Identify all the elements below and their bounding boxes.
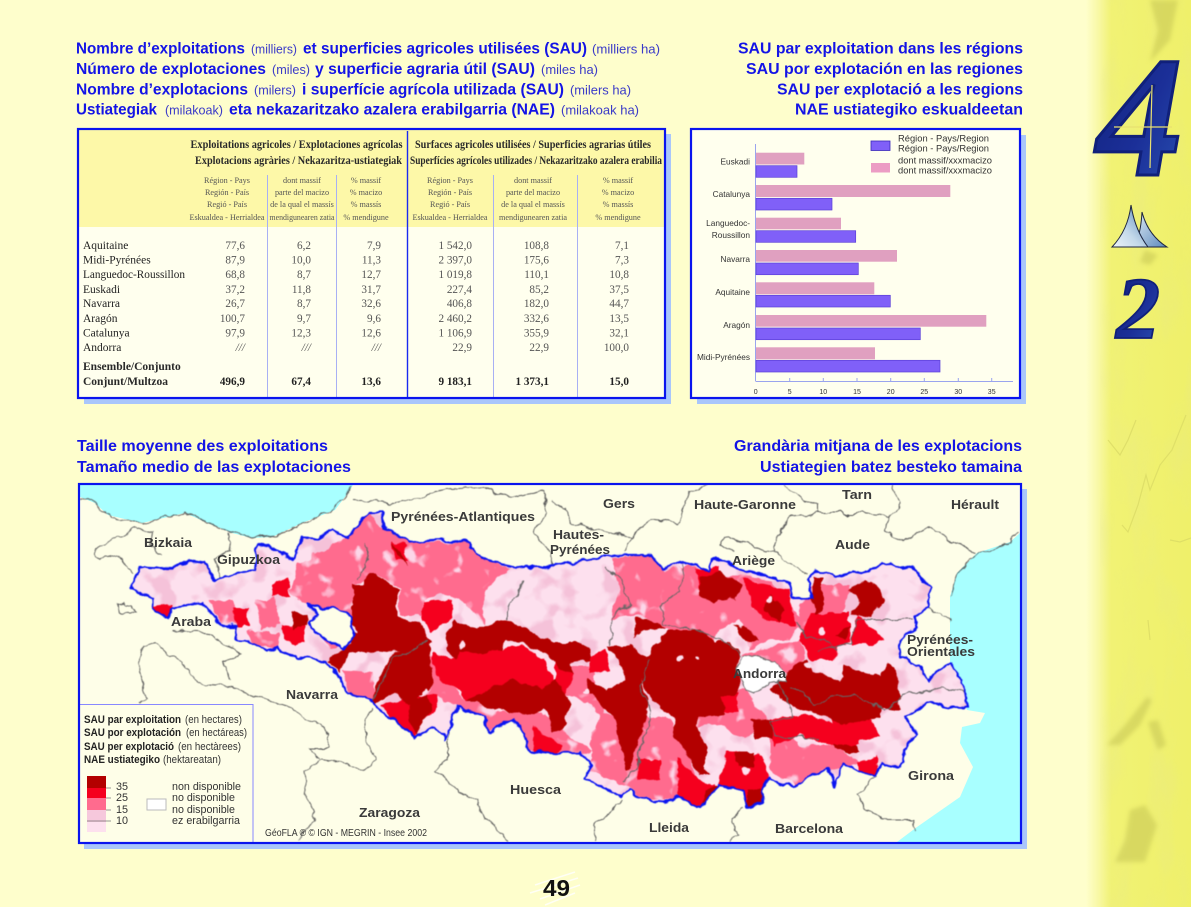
table values: 15,0 [609, 376, 629, 388]
map: sea areas [80, 485, 1020, 842]
chart axis values: 0 [754, 389, 758, 396]
map: place labels: Lleida [649, 821, 690, 835]
map: place labels: Hautes- [553, 528, 604, 542]
table values: 67,4 [291, 376, 311, 388]
page number: 49 [543, 875, 570, 901]
legend colour scale: 15 [116, 804, 128, 816]
table column headings: parte del macizo [506, 188, 560, 197]
table values: /// [301, 342, 312, 354]
legend title: (hektareatan) [163, 754, 221, 766]
table region names [83, 240, 185, 388]
legend title: (en hectares) [185, 714, 242, 726]
map: place labels: Araba [171, 615, 212, 629]
table values: 7,1 [615, 240, 629, 252]
heading: average holding size: Taille moyenne des exploitations [77, 438, 328, 455]
map: outer administrative borders [80, 485, 1020, 842]
table values: 87,9 [225, 254, 245, 266]
legend not available swatch: no disponible [172, 792, 235, 804]
heading: exploitations and SAU: (milers) [254, 82, 296, 98]
table values: 32,6 [361, 298, 381, 310]
chart category labels: Euskadi [720, 156, 750, 166]
map: place labels: Hérault [951, 498, 1000, 512]
map: region borders inside massif [357, 542, 967, 780]
heading: SAU per holding by region: NAE ustiategiko eskualdeetan [795, 102, 1023, 118]
chart legend: dont massif/xxxmacizo [898, 156, 992, 166]
map: 25 to 35 ha areas [153, 540, 885, 808]
map: choropleth of SAU per holding with massif outline [120, 505, 980, 815]
table values [220, 240, 629, 388]
heading: exploitations and SAU: Nombre d’explotacions [76, 82, 248, 98]
table values: 9,7 [297, 313, 311, 325]
heading: SAU per holding by region: SAU per explotació a les regions [777, 82, 1023, 98]
table values: 12,3 [291, 328, 311, 340]
chart legend: Région - Pays/Region [898, 144, 989, 154]
map: Andorra unavailable area [738, 655, 785, 693]
table values: 1 373,1 [515, 376, 549, 388]
map: place labels: Andorra [733, 667, 787, 681]
chart axis values [754, 389, 996, 396]
map: place labels: Pyrénées [550, 543, 610, 557]
heading: exploitations and SAU: (milliers ha) [592, 42, 660, 56]
heading: exploitations and SAU: i superfície agrícola utilizada (SAU) [302, 82, 564, 98]
table values: 10,0 [291, 254, 311, 266]
table column headings: parte del macizo [275, 188, 329, 197]
table values: 13,5 [609, 313, 629, 325]
table column headings [189, 139, 662, 222]
heading: exploitations and SAU: (milakoak ha) [561, 102, 639, 118]
heading: average holding size [77, 438, 1022, 476]
chart axis values: 25 [920, 389, 928, 396]
heading: exploitations and SAU: Nombre d’exploitations [76, 40, 245, 58]
legend title [84, 714, 247, 766]
table region names: Catalunya [83, 328, 130, 340]
legend colour scale: 25 [116, 792, 128, 804]
heading: exploitations and SAU: Número de explotaciones [76, 61, 266, 78]
map: under 10 ha base with 10 to 15 ha mottling [120, 505, 980, 815]
page number [530, 872, 580, 905]
heading: SAU per holding by region: SAU por explotación en las regiones [746, 61, 1023, 78]
map: 15 to 25 ha areas [208, 512, 860, 800]
map: place labels: Zaragoza [359, 806, 421, 820]
table values: 108,8 [524, 240, 549, 252]
legend title: SAU per explotació [84, 741, 174, 753]
heading: exploitations and SAU: Ustiategiak [76, 102, 157, 118]
chart axis values: 10 [819, 389, 827, 396]
table column headings: Région - Pays [204, 176, 250, 185]
table values: 2 460,2 [438, 313, 472, 325]
chart axes [756, 144, 1013, 382]
table column headings: % massif [603, 176, 633, 185]
legend colour scale [87, 776, 128, 832]
table column headings: Explotacions agràries / Nekazaritza-ustiategiak [195, 155, 403, 167]
legend not available swatch: ez erabilgarria [172, 815, 240, 827]
table values: 97,9 [225, 328, 245, 340]
heading: average holding size: Grandària mitjana de les explotacions [734, 438, 1022, 455]
table column headings: % macizo [602, 188, 634, 197]
table column headings: Superfícies agrícoles utilizades / Nekazaritzako azalera erabilia [410, 155, 662, 167]
table region names: Aragón [83, 313, 118, 325]
map: place labels: Haute-Garonne [694, 498, 796, 512]
table values: 9 183,1 [438, 376, 472, 388]
table region names: Languedoc-Roussillon [83, 269, 185, 281]
map legend [79, 704, 253, 843]
textured yellow side strip [1086, 0, 1191, 907]
map: place labels: Bizkaia [144, 536, 193, 550]
panel: bar chart [691, 129, 1026, 404]
table values: 100,7 [220, 313, 245, 325]
map: place labels: Barcelona [775, 822, 844, 836]
table column headings: dont massif [514, 176, 552, 185]
table values: 100,0 [604, 342, 629, 354]
table values: 175,6 [524, 254, 549, 266]
panel: map [79, 484, 1027, 849]
heading: exploitations and SAU: (milliers) [251, 42, 297, 56]
chapter number 4: 4 [1094, 23, 1183, 213]
table values: 182,0 [524, 298, 549, 310]
legend colour scale: 10 [116, 815, 128, 827]
chart category labels: Aquitaine [715, 287, 750, 297]
table column headings: % massís [351, 200, 381, 209]
table values: 227,4 [447, 284, 472, 296]
chart category labels: Navarra [720, 254, 750, 264]
chart category labels [697, 156, 750, 362]
table values: 32,1 [609, 328, 629, 340]
chart axis values: 35 [988, 389, 996, 396]
map: place labels: Pyrénées- [907, 633, 973, 647]
panel: data table [78, 129, 671, 404]
table values: 22,9 [529, 342, 549, 354]
map: place labels: Gipuzkoa [217, 553, 281, 567]
table values: 406,8 [447, 298, 472, 310]
legend title: (en hectàrees) [178, 741, 241, 753]
table column headings: % mendigune [343, 213, 389, 222]
heading: exploitations and SAU [76, 40, 660, 118]
table column headings: mendigunearen zatia [270, 213, 335, 222]
table values: 77,6 [225, 240, 245, 252]
legend not available swatch: non disponible [172, 781, 241, 793]
map: source credit: GéoFLA ® © IGN - MEGRIN - Insee 2002 [265, 828, 427, 839]
table values: 496,9 [220, 376, 245, 388]
table column headings: Eskualdea - Herrialdea [189, 213, 265, 222]
table column headings: Région - Pays [427, 176, 473, 185]
table values: 12,7 [361, 269, 381, 281]
heading: exploitations and SAU: (milakoak) [165, 102, 223, 118]
heading: average holding size: Ustiategien batez besteko tamaina [760, 459, 1022, 476]
legend title: SAU por explotación [84, 727, 181, 739]
map: place labels: Gers [603, 497, 635, 511]
table values: 31,7 [361, 284, 381, 296]
table values: 332,6 [524, 313, 549, 325]
heading: SAU per holding by region [738, 40, 1023, 118]
table values: 9,6 [367, 313, 381, 325]
table values: /// [235, 342, 246, 354]
map: place labels: Huesca [510, 783, 562, 797]
map: place labels: Ariège [732, 554, 775, 568]
legend title: NAE ustiategiko [84, 754, 160, 766]
map: place labels: Tarn [842, 488, 872, 502]
map: place labels [144, 488, 1000, 836]
table values: 1 019,8 [438, 269, 472, 281]
map: over 35 ha areas [293, 540, 901, 808]
legend title: (en hectáreas) [186, 727, 247, 739]
legend not available swatch: no disponible [172, 804, 235, 816]
heading: exploitations and SAU: y superficie agraria útil (SAU) [315, 61, 535, 78]
map: place labels: Navarra [286, 688, 339, 702]
table column headings: Región - País [205, 188, 249, 197]
table values: 22,9 [452, 342, 472, 354]
table values: 2 397,0 [438, 254, 472, 266]
map: place labels: Girona [908, 769, 955, 783]
heading: average holding size: Tamaño medio de las explotaciones [77, 459, 351, 476]
table values: 6,2 [297, 240, 311, 252]
chart category labels: Roussillon [712, 230, 750, 240]
table values: 8,7 [297, 269, 311, 281]
map: small light speckles [350, 597, 847, 774]
table region names: Midi-Pyrénées [83, 254, 151, 266]
table column headings: Eskualdea - Herrialdea [412, 213, 488, 222]
table region names: Aquitaine [83, 240, 128, 252]
table region names: Navarra [83, 298, 120, 310]
chart axis values: 30 [954, 389, 962, 396]
heading: exploitations and SAU: (milers ha) [570, 82, 631, 98]
table values: 68,8 [225, 269, 245, 281]
table column headings: dont massif [283, 176, 321, 185]
table column headings: Regió - País [207, 200, 247, 209]
table column headings: de la qual el massís [270, 200, 334, 209]
heading: exploitations and SAU: et superficies agricoles utilisées (SAU) [303, 40, 587, 58]
legend colour scale: 35 [116, 781, 128, 793]
table values: 7,3 [615, 254, 629, 266]
table values: 110,1 [524, 269, 549, 281]
heading: exploitations and SAU: eta nekazaritzako azalera erabilgarria (NAE) [229, 102, 555, 118]
table values: 37,5 [609, 284, 629, 296]
table values: 11,8 [292, 284, 311, 296]
table region names: Ensemble/Conjunto [83, 361, 181, 373]
heading: exploitations and SAU: (miles ha) [541, 62, 598, 77]
map: inner unavailable area [308, 603, 352, 648]
table values: 85,2 [529, 284, 549, 296]
chart axis values: 15 [853, 389, 861, 396]
map: place labels: Orientales [907, 645, 975, 659]
chart legend [871, 134, 992, 176]
table values: /// [371, 342, 382, 354]
chart legend: Région - Pays/Region [898, 134, 989, 144]
table column headings: mendigunearen zatia [499, 213, 567, 222]
chart category labels: Catalunya [713, 189, 750, 199]
table column headings: Región - País [428, 188, 472, 197]
table column headings: % massís [603, 200, 633, 209]
table region names: Andorra [83, 342, 121, 354]
table values: 37,2 [225, 284, 245, 296]
table column headings: % macizo [350, 188, 382, 197]
table column headings: de la qual el massís [501, 200, 565, 209]
map: place labels: Aude [835, 538, 870, 552]
table values: 12,6 [361, 328, 381, 340]
table values: 10,8 [609, 269, 629, 281]
table values: 1 542,0 [438, 240, 472, 252]
table region names: Euskadi [83, 284, 120, 296]
chart axis values: 5 [788, 389, 792, 396]
table values: 26,7 [225, 298, 245, 310]
table region names: Conjunt/Multzoa [83, 376, 168, 388]
table column headings: Regió - País [430, 200, 470, 209]
chart legend: dont massif/xxxmacizo [898, 166, 992, 176]
chapter sub-number 2: 2 [1114, 261, 1160, 358]
chart category labels: Midi-Pyrénées [697, 352, 750, 362]
table column headings: Exploitations agricoles / Explotaciones agrícolas [190, 139, 403, 151]
table column headings: % massif [351, 176, 381, 185]
table column headings: % mendigune [595, 213, 641, 222]
chart bars [756, 153, 986, 372]
heading: SAU per holding by region: SAU par exploitation dans les régions [738, 40, 1023, 58]
chart axis values: 20 [887, 389, 895, 396]
table values: 7,9 [367, 240, 381, 252]
map: massif outline [132, 513, 968, 808]
legend not available swatch [147, 781, 241, 827]
table column headings: Surfaces agricoles utilisées / Superficies agrarias útiles [415, 139, 651, 151]
table values: 1 106,9 [438, 328, 472, 340]
chart category labels: Languedoc- [706, 218, 750, 228]
heading: exploitations and SAU: (miles) [272, 62, 310, 77]
chart category labels: Aragón [723, 320, 750, 330]
table values: 355,9 [524, 328, 549, 340]
legend title: SAU par exploitation [84, 714, 181, 726]
icon: mountains [1112, 205, 1167, 247]
table values: 8,7 [297, 298, 311, 310]
table values: 44,7 [609, 298, 629, 310]
map: place labels: Pyrénées-Atlantiques [391, 510, 535, 524]
table values: 13,6 [361, 376, 381, 388]
table values: 11,3 [362, 254, 381, 266]
